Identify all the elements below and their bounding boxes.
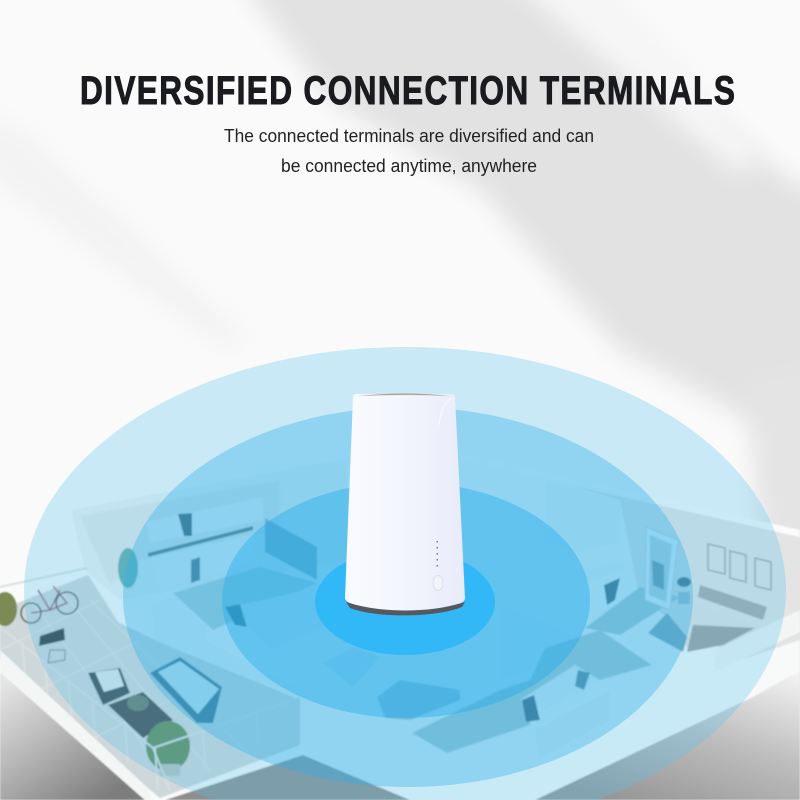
ring inner [315,549,495,655]
gray underside center [165,755,410,800]
gray underside right [535,672,800,800]
headboard [698,585,767,620]
white slab [0,460,800,800]
ring second [123,407,693,787]
nightstand lamp [677,577,691,587]
title: DIVERSIFIED CONNECTION TERMINALS [80,67,735,113]
status LEDs [436,541,438,566]
ledge [0,650,150,800]
railings [0,568,300,790]
kitchen floor [173,567,317,630]
upper cabinets [147,497,263,543]
front glass partitions [715,610,800,672]
pillows and bed centre [323,647,380,687]
lower cabinets [150,535,257,592]
mirror [645,527,678,610]
bed blanket centre [377,680,460,720]
ring third [222,482,590,718]
bed duvet [687,625,755,652]
building: apartment floor plan [0,452,800,800]
bbq grill [39,628,65,646]
router top ring [358,394,450,396]
bed foot blanket [648,613,687,652]
router base [346,602,465,615]
low partition wall [152,596,300,700]
plant kitchen [118,548,138,588]
plant left [0,592,17,626]
terrace sofa [150,657,222,723]
router seam [439,397,453,425]
terrace floor [0,575,300,798]
speckled wall [545,480,620,553]
subtitle: be connected anytime, anywhere [281,156,537,176]
armchair [88,668,130,705]
bed sheet [667,603,753,647]
back wall right [460,452,800,660]
study desk [580,560,626,582]
counter [148,526,253,557]
table [108,692,173,738]
interior walls [463,520,547,550]
bottom room floor [412,630,652,753]
signal rings [24,347,786,800]
router body [345,394,465,610]
terrace tile lines [0,590,250,780]
living sectional [230,587,340,650]
chairs [522,695,540,722]
subtitle: The connected terminals are diversified and can [224,126,594,146]
back wall left [71,458,347,600]
gray underside left [0,672,145,800]
subtitle [224,126,594,176]
bike [21,586,78,623]
router device [345,394,465,615]
ring outer [24,347,786,800]
plant front [146,721,190,771]
kitchen hood [178,513,192,536]
study floor [585,587,680,635]
tall unit [265,518,317,580]
picture frames [708,544,771,590]
power button [433,576,443,590]
kitchen door [191,557,200,583]
